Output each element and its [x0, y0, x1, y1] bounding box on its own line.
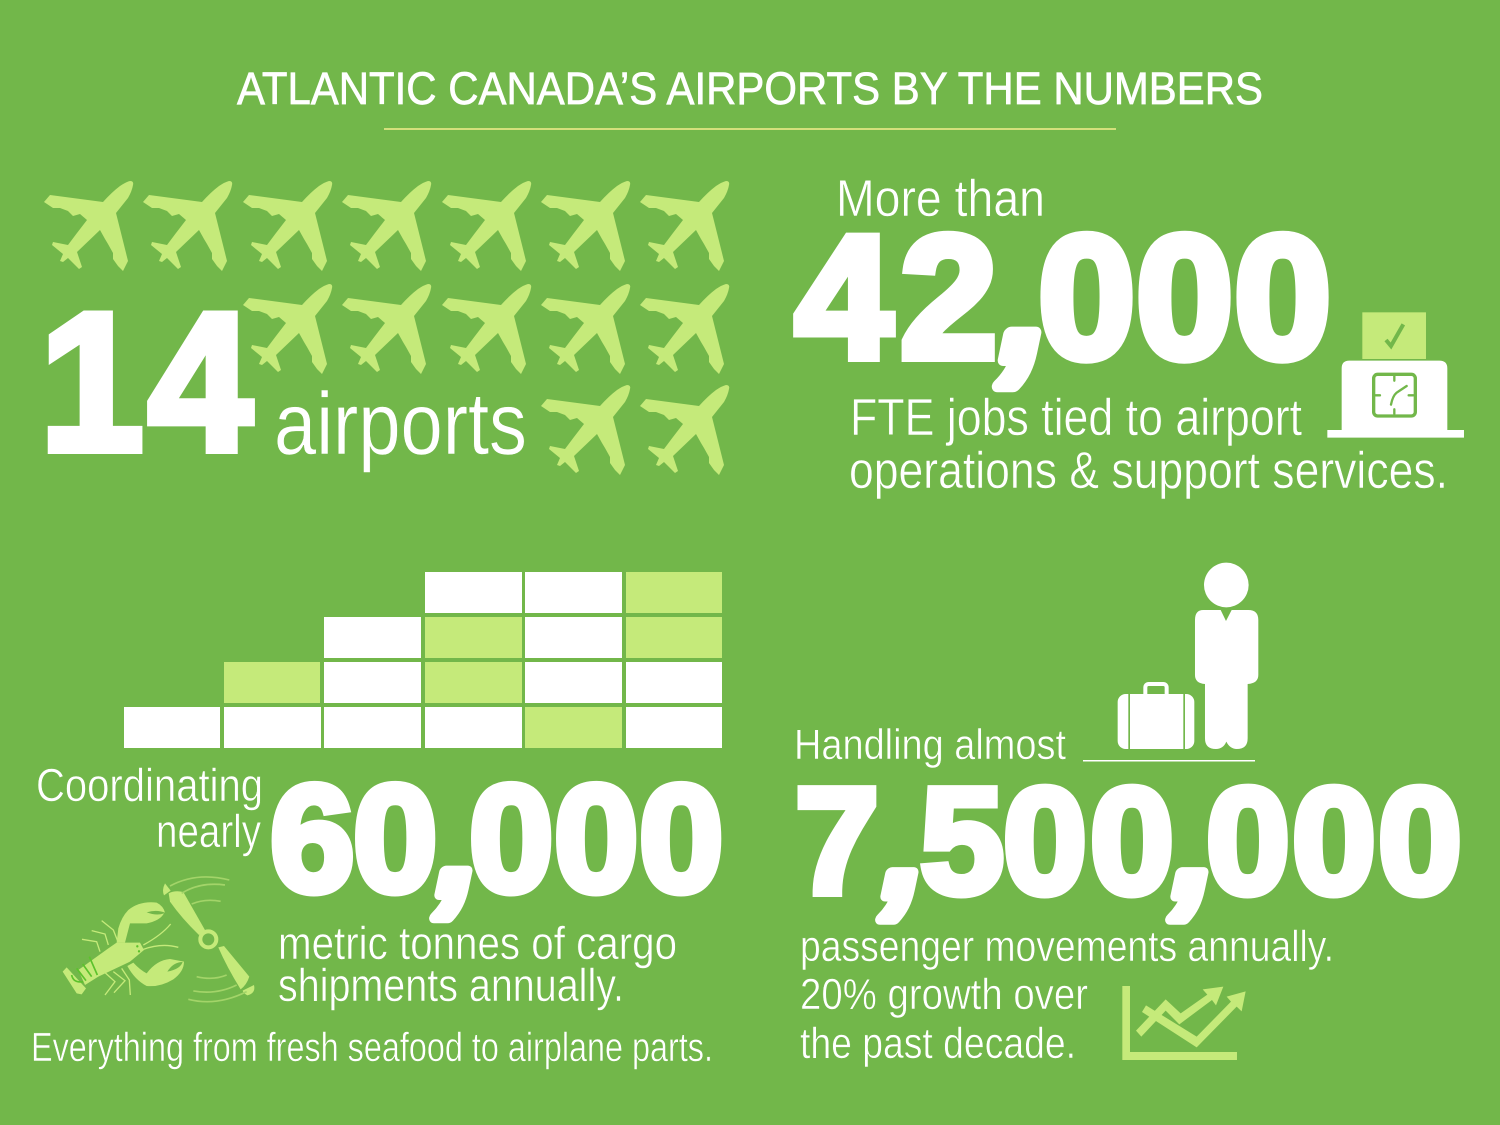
number: 60,000: , — [423, 760, 500, 927]
text: handling almost: Handling almost — [794, 721, 1066, 769]
text: passenger movements: passenger movements annually. — [800, 922, 1334, 971]
number: 7,500,000: 7500000 — [795, 756, 1462, 925]
stacked block chart — [124, 572, 722, 748]
text: more than: More than — [836, 170, 1045, 228]
number: 42,000: 42000 — [795, 200, 1331, 396]
number: 60,000: 60000 — [270, 754, 724, 924]
text: passenger movements — [800, 922, 1334, 1068]
text: metric tonnes: metric tonnes of cargo — [278, 917, 677, 969]
text: coordinating nearly — [36, 759, 263, 857]
icon: lobster and propeller — [63, 877, 254, 1002]
text: coordinating nearly: nearly — [156, 805, 261, 857]
panel: jobs — [795, 170, 1464, 500]
icon: time clock — [1327, 312, 1464, 438]
text: metric tonnes — [278, 917, 677, 1011]
title: ATLANTIC CANADA’S AIRPORTS BY THE NUMBERS — [237, 63, 1263, 114]
text: everything from: Everything from fresh seafood to airplane parts. — [31, 1024, 713, 1070]
panel: passengers — [794, 563, 1462, 1068]
text: passenger movements: 20% growth over — [800, 970, 1088, 1019]
icon: growth chart — [1122, 986, 1246, 1060]
text: metric tonnes: shipments annually. — [278, 959, 624, 1011]
text: passenger movements: the past decade. — [800, 1019, 1076, 1068]
text: jobs description — [849, 389, 1448, 500]
label: airports: airports — [274, 374, 527, 473]
panel: cargo — [31, 572, 724, 1070]
text: coordinating nearly: Coordinating — [36, 759, 263, 811]
number: 42,000: , — [985, 206, 1073, 396]
panel: airports — [40, 181, 729, 492]
number: 7,500,000: , — [869, 761, 946, 928]
number: 7,500,000: , — [1159, 761, 1236, 928]
icon: passenger with suitcase — [1118, 563, 1258, 750]
text: jobs description: FTE jobs tied to airport — [850, 389, 1302, 447]
airplane icons — [44, 181, 729, 475]
number: 14: 14 — [40, 272, 252, 492]
